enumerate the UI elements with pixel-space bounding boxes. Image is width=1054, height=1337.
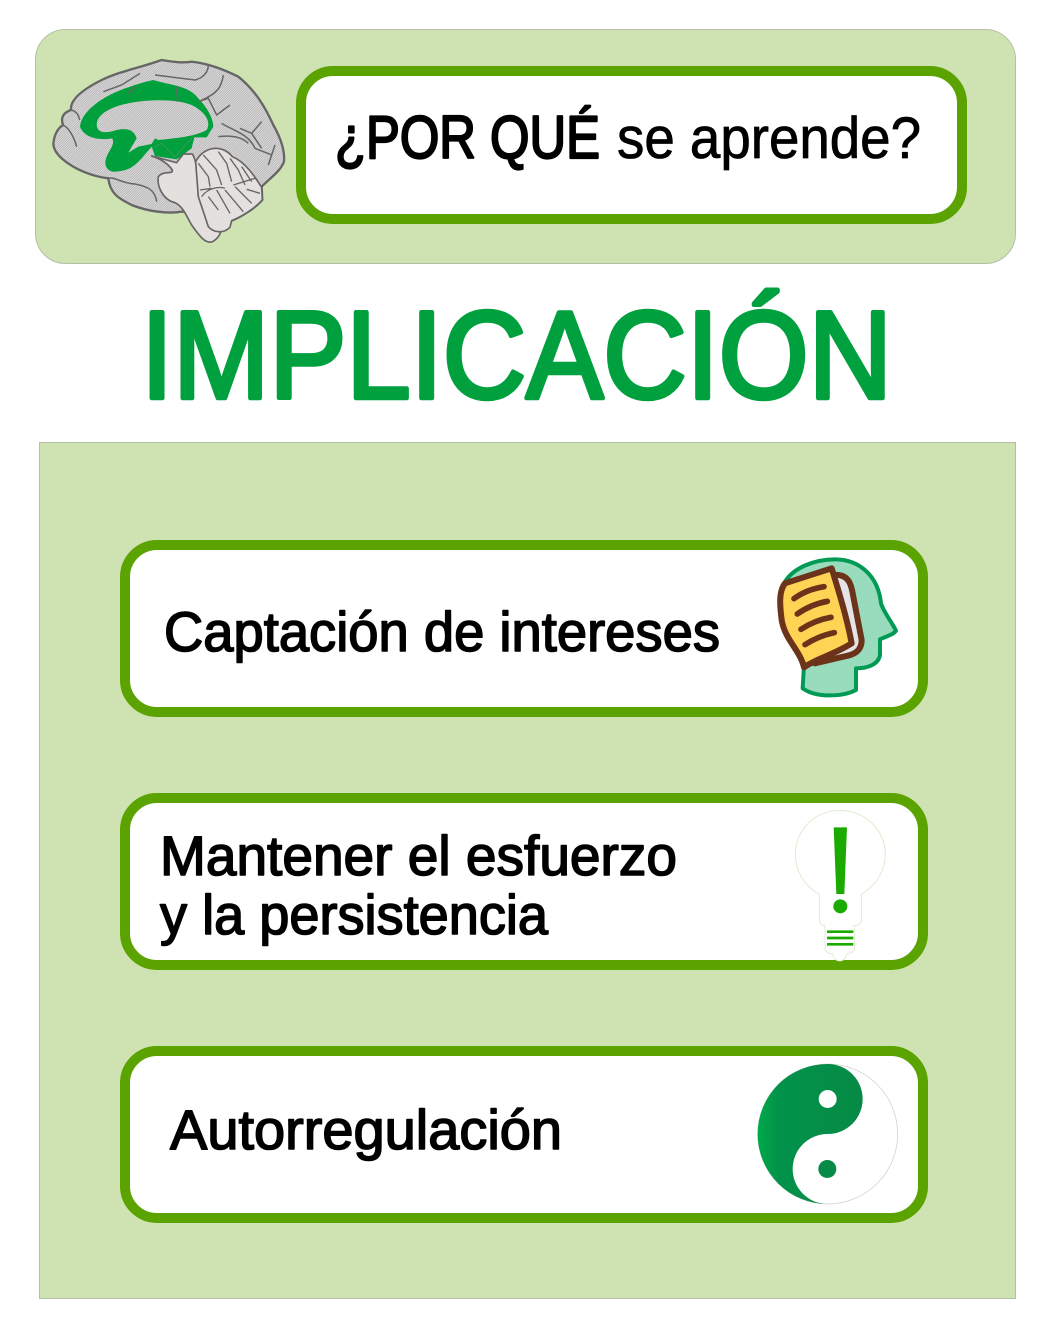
label: Mantener el esfuerzo xyxy=(160,824,677,887)
heading: why is it learned: ¿POR QUÉ xyxy=(335,104,600,171)
label: Autorregulación xyxy=(170,1098,562,1161)
card: self-regulation xyxy=(125,1051,923,1218)
icon: light bulb with exclamation mark xyxy=(795,810,885,961)
icon: brain with highlighted cingulate region xyxy=(53,60,284,242)
card: capturing interests xyxy=(125,545,923,712)
label: Captación de intereses xyxy=(164,600,720,663)
panel: three components xyxy=(40,442,1016,1298)
heading: why is it learned: se aprende? xyxy=(617,106,921,171)
card: maintaining effort and persistence xyxy=(125,798,923,965)
question box xyxy=(301,71,962,219)
panel: header xyxy=(36,30,1016,264)
icon: head with book xyxy=(780,559,896,695)
label: y la persistencia xyxy=(160,883,549,946)
icon: yin yang xyxy=(758,1064,898,1204)
title: IMPLICACIÓN xyxy=(141,287,892,425)
